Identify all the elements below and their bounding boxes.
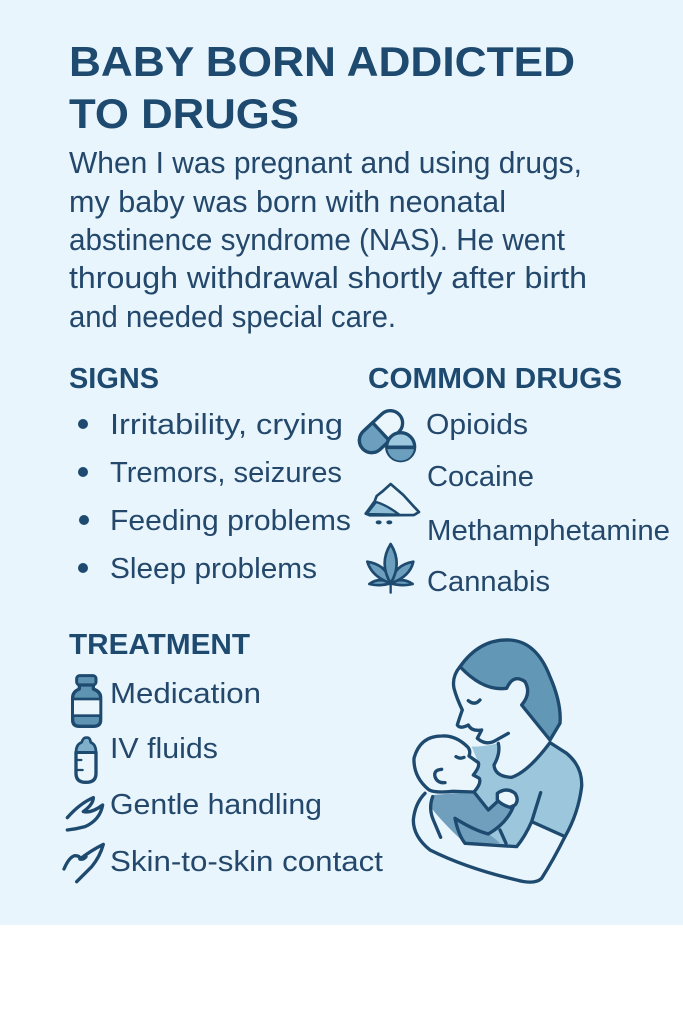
intro text: abstinence syndrome (NAS). He went — [69, 222, 565, 257]
panel: common drugs: Opioids — [426, 409, 528, 441]
icon: medication vial — [73, 676, 101, 726]
icon: skin-to-skin hands — [64, 844, 103, 882]
panel: common drugs: Methamphetamine — [427, 515, 670, 547]
intro text: through withdrawal shortly after birth — [69, 260, 587, 295]
panel: common drugs: Cannabis — [427, 566, 550, 598]
icon: gentle hand — [67, 798, 103, 830]
intro text: When I was pregnant and using drugs, — [69, 145, 582, 180]
panel: treatment — [64, 629, 383, 882]
baby body — [432, 792, 512, 843]
list: signs: Feeding problems — [110, 505, 351, 537]
intro text: and needed special care. — [69, 299, 396, 334]
panel: treatment: IV fluids — [110, 733, 218, 765]
icon: iv fluid bottle — [76, 738, 96, 782]
list: signs — [78, 409, 351, 585]
intro text — [69, 145, 587, 334]
heading: treatment: TREATMENT — [69, 629, 250, 661]
panel: common drugs: Cocaine — [427, 461, 534, 493]
panel: treatment: Medication — [110, 678, 261, 710]
icon: pills — [354, 406, 415, 461]
panel: common drugs — [354, 363, 670, 598]
panel: treatment: Skin-to-skin contact — [110, 846, 383, 878]
list: signs: Irritability, crying — [110, 409, 343, 441]
panel: signs — [69, 363, 351, 585]
heading: signs: SIGNS — [69, 363, 159, 395]
list: signs: Tremors, seizures — [110, 457, 342, 489]
icon: cannabis leaf — [367, 544, 413, 593]
list: signs: Sleep problems — [110, 553, 317, 585]
illustration: mother holding baby — [413, 640, 582, 882]
shirt — [433, 743, 582, 847]
heading: common drugs: COMMON DRUGS — [368, 363, 622, 395]
title: BABY BORN ADDICTED — [69, 38, 575, 85]
panel: treatment: Gentle handling — [110, 789, 322, 821]
title: TO DRUGS — [69, 90, 299, 137]
hair — [460, 640, 560, 740]
icon: powder pile — [366, 484, 419, 524]
title — [69, 38, 575, 137]
outlines — [413, 640, 582, 882]
intro text: my baby was born with neonatal — [69, 184, 506, 219]
